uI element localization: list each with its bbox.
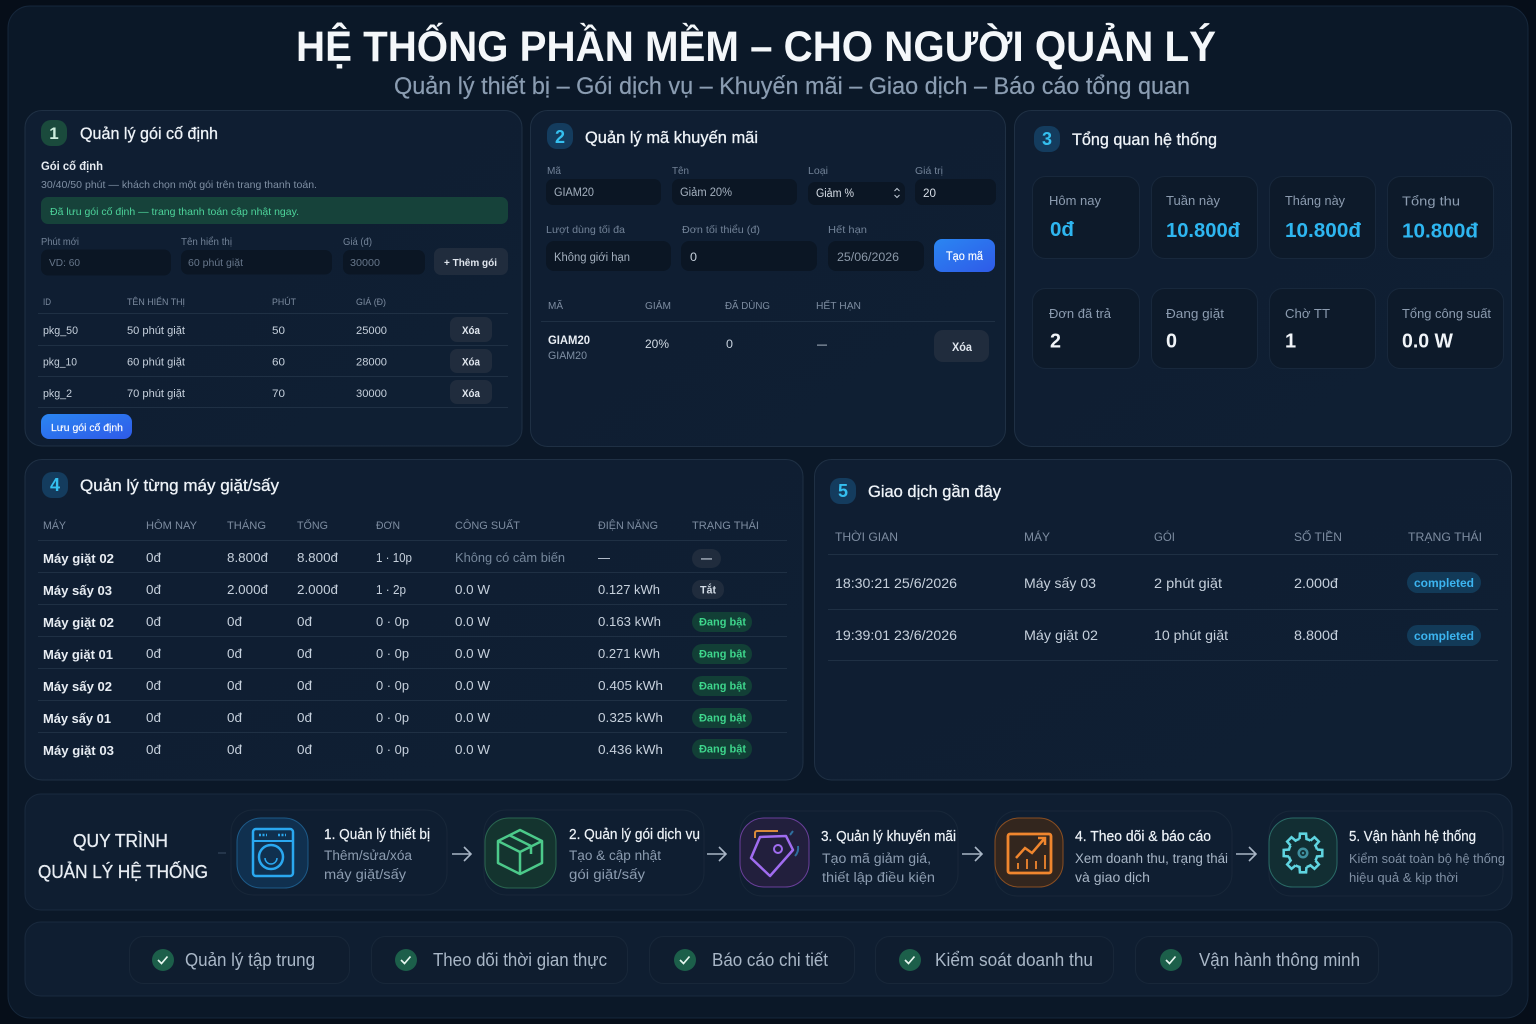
package table: PHÚT (272, 297, 296, 308)
step 5 text: Kiểm soát toàn bộ hệ thống (1349, 852, 1505, 866)
row: Máy giặt 02 second: 0.0 W (455, 614, 491, 629)
row: Máy giặt 02 (43, 549, 721, 568)
benefit: revenue control: Kiểm soát doanh thu (935, 950, 1093, 970)
stat card: total power: 0.0 W (1402, 330, 1453, 352)
row: Máy giặt 02: 0đ (146, 550, 162, 565)
row: Máy giặt 03: 0 · 0p (376, 742, 409, 757)
package section title: Gói cố định (41, 159, 103, 173)
transaction row 1: 2 phút giặt (1154, 575, 1222, 591)
row: Máy sấy 03: 2.000đ (297, 582, 339, 597)
workflow heading (38, 831, 208, 882)
add package form: 30000 (350, 257, 380, 269)
icon: washing machine (237, 818, 308, 888)
step 1 (231, 810, 447, 895)
step 3 text: Tạo mã giảm giá, (822, 851, 931, 866)
panel 2 heading: 2 (555, 127, 565, 147)
row: Máy sấy 02: 0đ (227, 678, 243, 693)
row: Máy giặt 02 second: 0đ (146, 614, 162, 629)
transaction row 1: completed (1414, 576, 1474, 590)
arrow 3 to 4 (962, 847, 982, 861)
promo table: ĐÃ DÙNG (725, 299, 770, 312)
package table: Xóa (462, 356, 481, 368)
machines table header: HÔM NAY (146, 519, 198, 532)
panel 4 heading: Quản lý từng máy giặt/sấy (80, 476, 279, 495)
step 2 (484, 810, 704, 895)
row: Máy sấy 02: 0.405 kWh (598, 678, 663, 693)
row: Máy sấy 01: 0đ (227, 710, 243, 725)
row: Máy sấy 02: 0đ (297, 678, 313, 693)
benefit: smart operation (1136, 936, 1378, 984)
step 3 text (821, 829, 956, 885)
promo table: HẾT HẠN (816, 299, 861, 312)
row: Máy giặt 01: 0 · 0p (376, 646, 409, 661)
transactions table header: SỐ TIỀN (1294, 529, 1342, 544)
row: Máy sấy 01: 0 · 0p (376, 710, 409, 725)
promo form: Loại (808, 165, 828, 177)
package table: pkg_2 (43, 388, 72, 400)
package description: 30/40/50 phút — khách chọn một gói trên trang thanh toán. (41, 179, 317, 191)
stat card: washing (1152, 288, 1258, 368)
step 4 text (1075, 829, 1228, 885)
step 1 text: máy giặt/sấy (324, 867, 406, 882)
panel 5: recent transactions (814, 460, 1512, 780)
benefit: revenue control (876, 936, 1114, 984)
panel: benefits bar (25, 922, 1512, 996)
transaction row 2: completed (1414, 629, 1474, 643)
step 1 text (324, 827, 430, 882)
transaction row 2 (835, 625, 1481, 646)
stat card: today: 0đ (1050, 219, 1075, 241)
step 2 text: gói giặt/sấy (569, 867, 645, 882)
save button: Lưu gói cố định (51, 422, 123, 434)
transactions table header: GÓI (1154, 529, 1175, 544)
transaction row 1: Máy sấy 03 (1024, 575, 1096, 591)
stat card: pending: 1 (1285, 330, 1296, 352)
transactions table header: MÁY (1024, 529, 1050, 544)
row: Máy giặt 02 second: 0đ (297, 614, 313, 629)
package table (38, 296, 508, 408)
stat card: this week: Tuần này (1166, 193, 1220, 208)
panel 5 heading (830, 478, 1001, 504)
machines table header: MÁY (43, 519, 67, 532)
package table: GIÁ (Đ) (356, 297, 386, 308)
package table: 60 (272, 356, 285, 368)
transactions table header: THỜI GIAN (835, 529, 898, 544)
workflow heading: QUẢN LÝ HỆ THỐNG (38, 861, 208, 882)
stat card: total power: Tổng công suất (1402, 306, 1491, 321)
promo table (541, 299, 995, 362)
promo form: 25/06/2026 (837, 252, 899, 264)
stat card: this month: Tháng này (1285, 193, 1345, 208)
transaction row 1: 18:30:21 25/6/2026 (835, 575, 957, 591)
step 3 text: thiết lập điều kiện (822, 870, 935, 885)
icon: chart (995, 818, 1063, 887)
title: HỆ THỐNG PHẦN MỀM – CHO NGƯỜI QUẢN LÝ (296, 22, 1216, 71)
row: Máy giặt 01: 0.0 W (455, 646, 491, 661)
benefit: realtime tracking (372, 936, 628, 984)
machines table header: TỔNG (297, 519, 328, 532)
stat card: this week (1152, 176, 1258, 258)
panel 1 heading: 1 (49, 124, 59, 143)
add package form: Phút mới (41, 236, 79, 248)
package table: pkg_50 (43, 325, 78, 337)
subtitle: Quản lý thiết bị – Gói dịch vụ – Khuyến mãi – Giao dịch – Báo cáo tổng quan (394, 73, 1190, 100)
package table: ID (43, 297, 51, 308)
step 5 text: 5. Vận hành hệ thống (1349, 829, 1476, 845)
package table: 25000 (356, 325, 387, 337)
stat card: this week: 10.800đ (1166, 220, 1241, 242)
row: Máy sấy 01: 0.0 W (455, 710, 491, 725)
panel 5 heading: 5 (838, 481, 848, 501)
panel 3 heading: Tổng quan hệ thống (1072, 130, 1217, 149)
stat card: total power (1388, 288, 1504, 368)
row: Máy sấy 03: 1 · 2p (376, 582, 406, 597)
row: Máy sấy 01: 0đ (146, 710, 162, 725)
row: Máy giặt 03: Máy giặt 03 (43, 743, 114, 758)
step 2 text (569, 827, 700, 882)
package table: 70 (272, 388, 285, 400)
row: Máy giặt 01: Máy giặt 01 (43, 647, 113, 662)
transaction row 1 (835, 572, 1481, 593)
machines table header: TRẠNG THÁI (692, 519, 759, 532)
step 2 text: Tạo & cập nhật (569, 848, 661, 863)
row: Máy sấy 01: Đang bật (699, 712, 746, 724)
promo form: Lượt dùng tối đa (546, 224, 625, 236)
row: Máy sấy 03: 0.0 W (455, 582, 491, 597)
add package form: Tên hiển thị (181, 236, 232, 248)
panel 3: overview (1014, 110, 1512, 446)
promo form: Tên (672, 165, 689, 177)
step 5 (1269, 811, 1505, 896)
package table: Xóa (462, 325, 481, 337)
transactions table header (835, 529, 1482, 544)
row: Máy giặt 02: — (701, 553, 712, 565)
row: Máy giặt 01: 0.271 kWh (598, 646, 660, 661)
transactions table header: TRẠNG THÁI (1408, 529, 1482, 544)
row: Máy giặt 01: 0đ (146, 646, 162, 661)
promo table: GIAM20 (548, 350, 587, 362)
stat card: returned orders (1032, 288, 1140, 368)
stat card: pending: Chờ TT (1285, 306, 1330, 321)
step 1 text: 1. Quản lý thiết bị (324, 827, 430, 843)
row: Máy giặt 01: Đang bật (699, 648, 746, 660)
row: Máy giặt 03: 0đ (227, 742, 243, 757)
row: Máy giặt 01: 0đ (297, 646, 313, 661)
icon: promo tag (740, 818, 809, 887)
add package form: VD: 60 (49, 257, 80, 269)
arrow 2 to 3 (707, 847, 726, 861)
package table: Xóa (462, 388, 481, 400)
row: Máy giặt 02: 8.800đ (227, 550, 269, 565)
panel 2: promo codes (530, 110, 1006, 446)
row: Máy giặt 01: 0đ (227, 646, 243, 661)
promo form: Mã (547, 165, 561, 177)
promo form: 20 (923, 188, 936, 200)
transaction row 2: Máy giặt 02 (1024, 627, 1098, 643)
panel: workflow (25, 794, 1512, 910)
row: Máy giặt 01 (43, 644, 752, 664)
step 4 text: Xem doanh thu, trạng thái (1075, 851, 1228, 866)
workflow heading: QUY TRÌNH (73, 831, 168, 851)
row: Máy sấy 01: Máy sấy 01 (43, 711, 111, 726)
row: Máy sấy 02: Máy sấy 02 (43, 679, 112, 694)
stat card: this month (1270, 176, 1376, 258)
panel 2 heading: Quản lý mã khuyến mãi (585, 128, 758, 147)
step 5 text (1349, 829, 1505, 885)
row: Máy sấy 01: 0đ (297, 710, 313, 725)
package table: TÊN HIỂN THỊ (127, 296, 185, 308)
icon: package box (485, 818, 556, 888)
benefit: detailed reports (650, 936, 854, 984)
step 1 text: Thêm/sửa/xóa (324, 848, 412, 863)
row: Máy giặt 02: 8.800đ (297, 550, 339, 565)
panel 4: machines (25, 460, 803, 780)
row: Máy giặt 02 second (43, 612, 752, 632)
step 3 text: 3. Quản lý khuyến mãi (821, 829, 956, 845)
transaction row 2: 8.800đ (1294, 627, 1338, 643)
transaction row 1: 2.000đ (1294, 575, 1338, 591)
add package form (41, 236, 508, 276)
row: Máy sấy 03: 0đ (146, 582, 162, 597)
save button (41, 414, 132, 439)
package table: 70 phút giặt (127, 388, 185, 400)
row: Máy giặt 02: — (598, 550, 610, 565)
machines table header: ĐƠN (376, 520, 400, 532)
package table: 30000 (356, 388, 387, 400)
promo table: 0 (726, 337, 733, 351)
row: Máy giặt 03: 0.436 kWh (598, 742, 663, 757)
benefit: smart operation: Vận hành thông minh (1199, 950, 1360, 970)
success alert: Đã lưu gói cố định — trang thanh toán cập nhật ngay. (50, 206, 299, 218)
icon: gear (1269, 818, 1337, 887)
promo form: Giá trị (915, 165, 943, 177)
promo table: GIẢM (645, 299, 671, 312)
row: Máy giặt 02: Không có cảm biến (455, 550, 565, 565)
promo form: Tạo mã (946, 251, 984, 263)
promo form: Không giới hạn (554, 252, 630, 264)
step 5 text: hiệu quả & kịp thời (1349, 871, 1458, 885)
promo table: GIAM20 (548, 335, 590, 347)
stat card: today (1032, 176, 1140, 258)
transaction row 2: 10 phút giặt (1154, 627, 1228, 643)
promo table: 20% (645, 337, 669, 351)
panel 1 heading: Quản lý gói cố định (80, 124, 218, 143)
package table: 50 phút giặt (127, 325, 185, 337)
panel 1: fixed packages (25, 110, 522, 446)
package table: 60 phút giặt (127, 356, 185, 368)
row: Máy sấy 02 (43, 676, 752, 696)
benefit: detailed reports: Báo cáo chi tiết (712, 950, 828, 970)
promo table: — (817, 337, 827, 351)
benefit: centralised management: Quản lý tập trung (185, 950, 315, 970)
benefit: realtime tracking: Theo dõi thời gian thực (433, 950, 607, 970)
stat card: this month: 10.800đ (1285, 220, 1362, 242)
row: Máy sấy 02: Đang bật (699, 680, 746, 692)
benefit: centralised management (130, 936, 350, 984)
row: Máy sấy 03: 2.000đ (227, 582, 269, 597)
panel 3 heading: 3 (1042, 129, 1052, 149)
package table: 28000 (356, 356, 387, 368)
add package form: Giá (đ) (343, 236, 372, 248)
row: Máy sấy 02: 0đ (146, 678, 162, 693)
panel 4 heading: 4 (50, 475, 60, 495)
arrow 4 to 5 (1236, 847, 1256, 861)
row: Máy sấy 03: 0.127 kWh (598, 582, 660, 597)
package table: 50 (272, 325, 285, 337)
row: Máy giặt 02 second: 0đ (227, 614, 243, 629)
stat card: total revenue: Tổng thu (1402, 194, 1460, 208)
stat card: returned orders: Đơn đã trả (1049, 306, 1112, 321)
package table: pkg_10 (43, 356, 77, 368)
row: Máy giặt 02: 1 · 10p (376, 550, 412, 565)
promo form: Giảm % (816, 188, 854, 200)
stat card: today: Hôm nay (1049, 193, 1101, 208)
row: Máy giặt 02 second: Máy giặt 02 (43, 615, 114, 630)
row: Máy giặt 03: 0đ (146, 742, 162, 757)
stat card: returned orders: 2 (1050, 330, 1061, 352)
row: Máy sấy 03 (43, 580, 724, 599)
row: Máy giặt 02: Máy giặt 02 (43, 551, 114, 566)
promo form: Giảm 20% (680, 187, 732, 199)
step 3 (740, 811, 958, 896)
row: Máy giặt 03: Đang bật (699, 744, 746, 756)
promo form: Đơn tối thiểu (đ) (682, 224, 760, 236)
machines table header: THÁNG (227, 519, 266, 532)
row: Máy giặt 03: 0.0 W (455, 742, 491, 757)
row: Máy giặt 02 second: 0 · 0p (376, 614, 409, 629)
row: Máy sấy 01 (43, 708, 752, 728)
panel 1 heading (41, 120, 218, 146)
stat card: washing: Đang giặt (1166, 306, 1224, 321)
add package form: + Thêm gói (444, 257, 497, 269)
promo form (546, 165, 996, 272)
stat card: washing: 0 (1166, 330, 1177, 352)
step 4 text: và giao dịch (1075, 870, 1150, 885)
machines table header (43, 519, 759, 532)
machines table header: CÔNG SUẤT (455, 519, 520, 532)
step 4 (995, 811, 1232, 896)
step 4 text: 4. Theo dõi & báo cáo (1075, 829, 1211, 845)
panel 2 heading (547, 123, 758, 149)
arrow 1 to 2 (452, 847, 471, 861)
panel 5 heading: Giao dịch gần đây (868, 482, 1001, 501)
row: Máy sấy 03: Tắt (700, 584, 716, 596)
promo form: GIAM20 (554, 187, 594, 199)
row: Máy sấy 02: 0 · 0p (376, 678, 409, 693)
row: Máy sấy 01: 0.325 kWh (598, 710, 663, 725)
success alert (41, 197, 508, 224)
row: Máy sấy 02: 0.0 W (455, 678, 491, 693)
add package form: 60 phút giặt (188, 257, 243, 269)
panel 4 heading (42, 472, 279, 498)
promo table: MÃ (548, 299, 563, 312)
machines table header: ĐIỆN NĂNG (598, 519, 658, 532)
row: Máy giặt 02 second: Đang bật (699, 616, 746, 628)
panel 3 heading (1034, 126, 1217, 152)
stat card: total revenue (1388, 176, 1494, 258)
stat card: pending (1270, 288, 1376, 368)
row: Máy giặt 03: 0đ (297, 742, 313, 757)
row: Máy giặt 03 (43, 739, 752, 759)
promo table: Xóa (952, 340, 972, 354)
row: Máy giặt 02 second: 0.163 kWh (598, 614, 661, 629)
stat card: total revenue: 10.800đ (1402, 220, 1479, 242)
row: Máy sấy 03: Máy sấy 03 (43, 583, 112, 598)
promo form: Hết hạn (828, 224, 867, 236)
promo form: 0 (690, 252, 697, 264)
transaction row 2: 19:39:01 23/6/2026 (835, 627, 957, 643)
step 2 text: 2. Quản lý gói dịch vụ (569, 827, 700, 843)
